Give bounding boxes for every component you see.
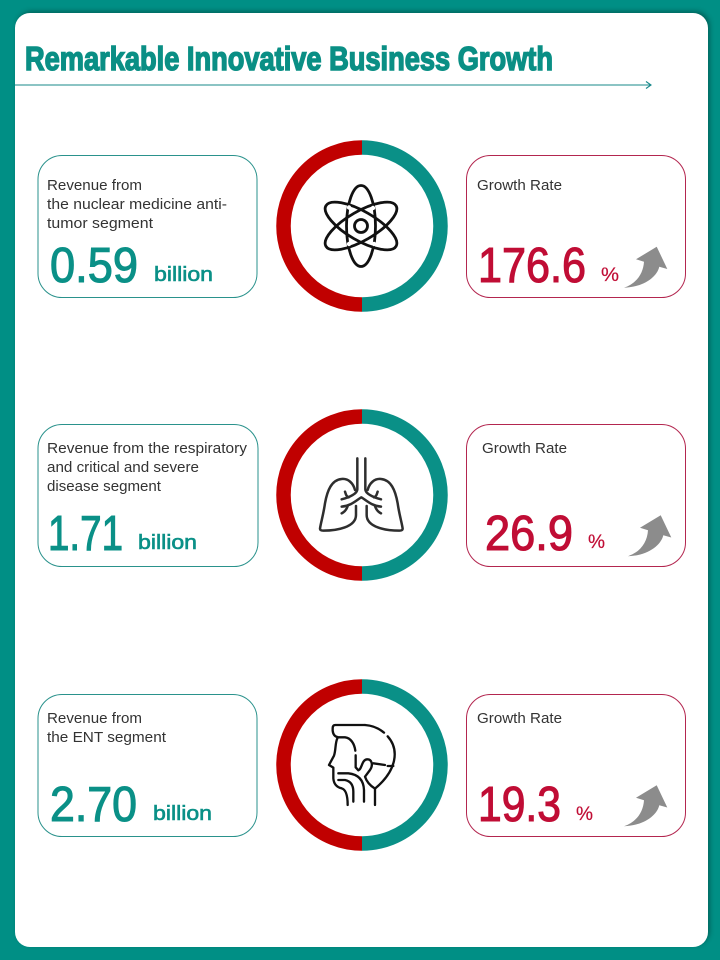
value: 1.71 billion: 1.71 xyxy=(48,507,123,561)
panel: respiratory revenue xyxy=(38,424,258,566)
value: 2.70 billion: 2.70 xyxy=(50,778,137,832)
value: 2.70 billion: billion xyxy=(153,802,212,825)
value: 1.71 billion: billion xyxy=(138,531,197,554)
donut ring: respiratory xyxy=(284,416,440,574)
text: nuclear medicine description: Revenue from xyxy=(47,178,142,194)
text: respiratory description: disease segment xyxy=(47,479,161,495)
icon: up arrow xyxy=(624,785,667,826)
icon: up arrow xyxy=(624,247,667,288)
arrow: title underline xyxy=(15,82,651,88)
donut ring: nuclear medicine xyxy=(284,148,440,304)
text: respiratory description: Revenue from the respiratory xyxy=(47,441,248,457)
value: 19.3 percent: 19.3 xyxy=(478,778,561,832)
text: ENT description: Revenue from xyxy=(47,711,142,727)
value: 176.6 percent: 176.6 xyxy=(478,239,586,293)
title: Remarkable Innovative Business Growth xyxy=(25,40,553,77)
text: nuclear medicine description: tumor segment xyxy=(47,216,153,232)
panel: respiratory growth rate xyxy=(466,424,686,566)
value: 0.59 billion xyxy=(50,239,213,293)
text: nuclear medicine description: the nuclear medicine anti- xyxy=(47,197,227,213)
value: 26.9 percent: 26.9 xyxy=(485,507,573,561)
text: ENT description: the ENT segment xyxy=(47,730,166,746)
label: growth rate: Growth Rate xyxy=(477,178,562,194)
panel: ENT growth rate xyxy=(466,694,686,836)
icon: atom xyxy=(319,186,403,266)
value: 176.6 percent: % xyxy=(601,265,619,286)
text: nuclear medicine description xyxy=(47,178,227,232)
donut ring: ENT xyxy=(284,686,440,844)
text: ENT description xyxy=(47,711,166,746)
label: growth rate: Growth Rate xyxy=(477,711,562,727)
label: growth rate: Growth Rate xyxy=(482,441,567,457)
panel: nuclear medicine growth rate xyxy=(466,156,686,298)
icon: head and throat xyxy=(329,725,395,805)
text: respiratory description xyxy=(47,441,248,495)
icon: lungs xyxy=(320,458,403,531)
value: 2.70 billion xyxy=(50,778,212,832)
value: 0.59 billion: billion xyxy=(154,263,213,286)
text: respiratory description: and critical and severe xyxy=(47,460,199,476)
panel: nuclear medicine revenue xyxy=(38,156,257,298)
value: 1.71 billion xyxy=(48,507,197,561)
icon: up arrow xyxy=(628,515,671,556)
value: 19.3 percent: % xyxy=(576,804,593,825)
value: 26.9 percent: % xyxy=(588,532,605,553)
value: 0.59 billion: 0.59 xyxy=(50,239,138,293)
panel: ENT revenue xyxy=(38,694,257,836)
